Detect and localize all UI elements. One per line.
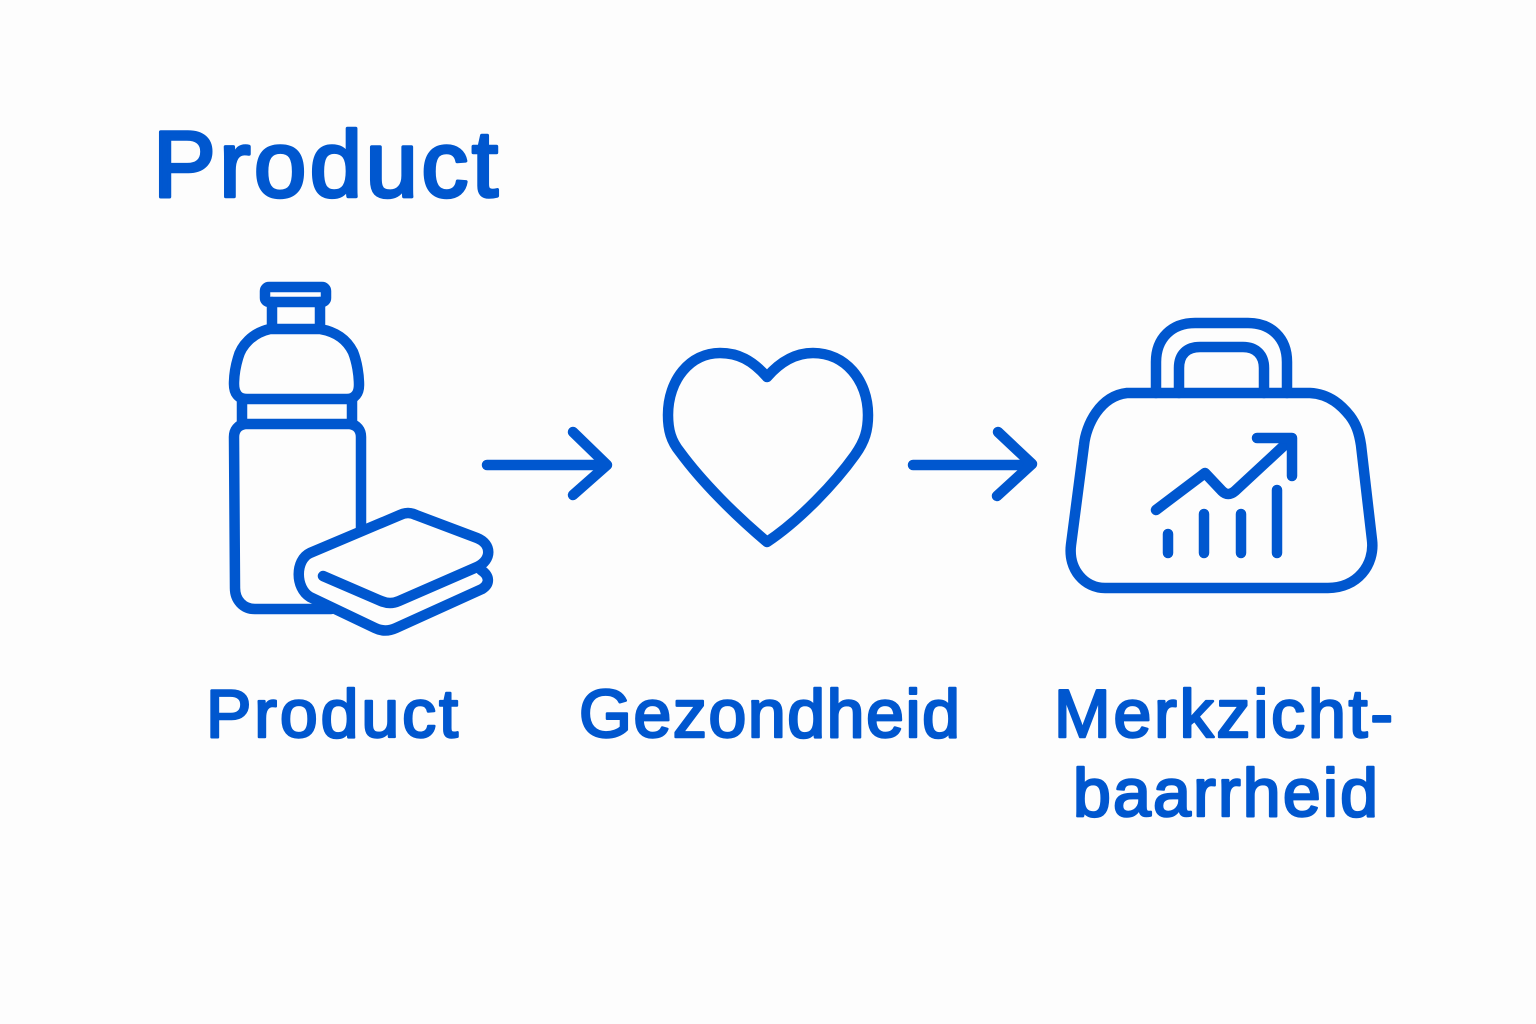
- label: brand visibility: [1054, 676, 1393, 831]
- label: health: Gezondheid: [579, 676, 960, 752]
- icon: bag with growth chart: [1071, 323, 1372, 588]
- arrow: health to visibility: [913, 432, 1032, 496]
- icon: bottle and towel: [234, 287, 488, 630]
- label: brand visibility: baarrheid: [1073, 755, 1378, 831]
- title: Product: [153, 112, 498, 216]
- icon: heart: [668, 353, 868, 542]
- label: brand visibility: Merkzicht-: [1054, 676, 1393, 752]
- label: product: Product: [206, 676, 458, 752]
- arrow: product to health: [487, 432, 607, 495]
